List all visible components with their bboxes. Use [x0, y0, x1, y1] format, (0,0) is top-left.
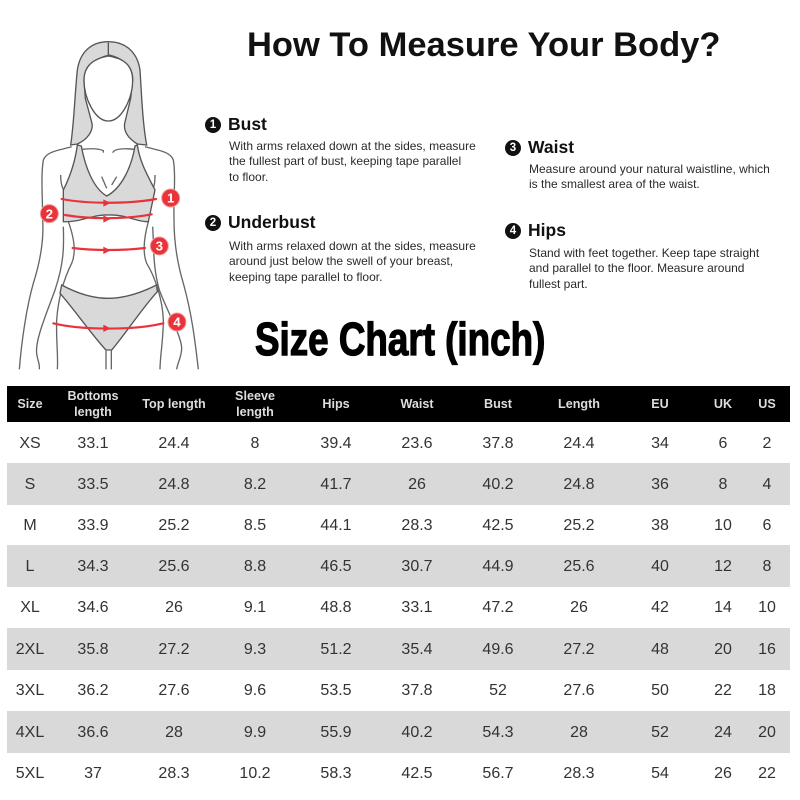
row XL: 33.1 [401, 599, 433, 616]
row 2XL: 27.2 [563, 641, 595, 658]
table header: UK [714, 397, 732, 411]
description: waist: Measure around your natural waistline, which [529, 162, 770, 176]
description: underbust [229, 239, 476, 284]
row M: 25.2 [158, 517, 190, 534]
description: bust: With arms relaxed down at the sides, measure [229, 139, 476, 153]
row XL: 34.6 [77, 599, 109, 616]
table header: Bust [484, 397, 512, 411]
row 3XL: 37.8 [401, 682, 433, 699]
heading: underbust: Underbust [228, 212, 316, 232]
row 5XL: 5XL [16, 765, 44, 782]
number badge 2 [205, 215, 221, 231]
row XS: 34 [651, 435, 669, 452]
row XL: 26 [570, 599, 588, 616]
row XL: 14 [714, 599, 732, 616]
row M: M [23, 517, 37, 534]
row 4XL: 4XL [16, 724, 44, 741]
row 4XL: 54.3 [482, 724, 514, 741]
table header: length [236, 405, 274, 419]
briefs [60, 285, 157, 350]
illustration: body with measurement lines [18, 41, 199, 370]
row 5XL: 28.3 [563, 765, 595, 782]
row 5XL: 42.5 [401, 765, 433, 782]
row 4XL: 40.2 [401, 724, 433, 741]
table header: EU [651, 397, 669, 411]
row L: 12 [714, 558, 732, 575]
table header: Waist [400, 397, 434, 411]
row L: 30.7 [401, 558, 433, 575]
number badge 1: 1 [210, 119, 216, 131]
row 2XL: 49.6 [482, 641, 514, 658]
number badge 4: 4 [510, 225, 516, 237]
row 2XL: 16 [758, 641, 776, 658]
measurement badges: 2 [46, 206, 53, 221]
table header: Top length [142, 397, 206, 411]
row L: 25.6 [158, 558, 190, 575]
row XL: 47.2 [482, 599, 514, 616]
row 5XL: 54 [651, 765, 669, 782]
table header: length [74, 405, 112, 419]
row 2XL: 9.3 [244, 641, 266, 658]
row 2XL: 2XL [16, 641, 44, 658]
row XL: 9.1 [244, 599, 266, 616]
row S: 41.7 [320, 476, 352, 493]
row S [7, 463, 790, 505]
row L: 44.9 [482, 558, 514, 575]
description: underbust: keeping tape parallel to floor. [229, 270, 382, 284]
heading: size chart: Size Chart (inch) [255, 313, 545, 365]
row 3XL [16, 682, 776, 699]
measurement badges: 3 [156, 239, 163, 254]
row XS: 6 [719, 435, 727, 452]
text block: underbust [205, 212, 476, 284]
row S: 33.5 [77, 476, 109, 493]
heading: bust: Bust [228, 114, 267, 134]
table header: Sleeve [235, 389, 275, 403]
description: hips [529, 246, 760, 291]
description: underbust: With arms relaxed down at the sides, measure [229, 239, 476, 253]
table: size chart [7, 386, 790, 782]
row S: 36 [651, 476, 669, 493]
description: bust: the fullest part of bust, keeping tape parallel [229, 154, 461, 168]
row 3XL: 27.6 [158, 682, 190, 699]
row L: 8.8 [244, 558, 266, 575]
text block: hips [505, 220, 760, 291]
heading: waist: Waist [528, 137, 574, 157]
table header [7, 386, 790, 422]
row 5XL: 22 [758, 765, 776, 782]
row XS: 33.1 [77, 435, 109, 452]
row M: 25.2 [563, 517, 595, 534]
row L: 25.6 [563, 558, 595, 575]
row S: 40.2 [482, 476, 514, 493]
row XS [19, 435, 771, 452]
row M: 28.3 [401, 517, 433, 534]
row L: L [26, 558, 34, 575]
row 2XL: 48 [651, 641, 669, 658]
row M: 10 [714, 517, 732, 534]
row 2XL: 35.4 [401, 641, 433, 658]
measurement lines [53, 199, 163, 329]
row 4XL [7, 711, 790, 753]
row XS: 37.8 [482, 435, 514, 452]
row S: S [25, 476, 35, 493]
title: How To Measure Your Body? [247, 26, 720, 64]
row 2XL: 27.2 [158, 641, 190, 658]
row 3XL: 22 [714, 682, 732, 699]
description: hips: fullest part. [529, 277, 588, 291]
row XS: XS [19, 435, 41, 452]
row 4XL: 55.9 [320, 724, 352, 741]
row 4XL: 52 [651, 724, 669, 741]
row 4XL: 36.6 [77, 724, 109, 741]
body outline [19, 147, 198, 369]
arrowheads [103, 199, 111, 332]
number badge 3: 3 [510, 142, 516, 154]
row S: 8 [719, 476, 727, 493]
row 5XL: 10.2 [239, 765, 271, 782]
text block: waist [505, 137, 770, 191]
measurement badges [40, 189, 186, 331]
row 5XL: 26 [714, 765, 732, 782]
row S: 24.8 [563, 476, 595, 493]
row 5XL: 28.3 [158, 765, 190, 782]
row M: 8.5 [244, 517, 266, 534]
measurement badges: 4 [173, 315, 181, 330]
measurement badges: 1 [167, 191, 175, 206]
description: bust [229, 139, 476, 184]
description: hips: and parallel to the floor. Measure around [529, 261, 744, 275]
row XS: 24.4 [158, 435, 190, 452]
row 4XL: 28 [570, 724, 588, 741]
row XL: 42 [651, 599, 669, 616]
description: bust: to floor. [229, 170, 268, 184]
row 3XL: 9.6 [244, 682, 266, 699]
row XL [20, 599, 776, 616]
row 3XL: 52 [489, 682, 507, 699]
row S: 24.8 [158, 476, 190, 493]
description: waist: is the smallest area of the waist. [529, 177, 700, 191]
row 3XL: 3XL [16, 682, 44, 699]
row L: 40 [651, 558, 669, 575]
row M [23, 517, 771, 534]
table header: Length [558, 397, 600, 411]
bra [63, 145, 155, 222]
row 4XL: 28 [165, 724, 183, 741]
row M: 44.1 [320, 517, 352, 534]
row XS: 39.4 [320, 435, 352, 452]
table header: US [758, 397, 776, 411]
row XS: 8 [251, 435, 259, 452]
row XS: 24.4 [563, 435, 595, 452]
row M: 33.9 [77, 517, 109, 534]
row 5XL: 37 [84, 765, 102, 782]
hair [71, 42, 147, 145]
heading: hips: Hips [528, 220, 566, 240]
row 5XL: 56.7 [482, 765, 514, 782]
row S: 8.2 [244, 476, 266, 493]
text block: bust [205, 114, 476, 184]
row L [7, 545, 790, 587]
row 3XL: 50 [651, 682, 669, 699]
row XL: 10 [758, 599, 776, 616]
row XS: 2 [763, 435, 771, 452]
row M: 38 [651, 517, 669, 534]
description: hips: Stand with feet together. Keep tape straight [529, 246, 759, 260]
row XL: 26 [165, 599, 183, 616]
number badge 2: 2 [210, 217, 216, 229]
row L: 34.3 [77, 558, 109, 575]
row M: 6 [763, 517, 771, 534]
row 3XL: 18 [758, 682, 776, 699]
number badge 4 [505, 223, 521, 239]
row 2XL [7, 628, 790, 670]
row 4XL: 24 [714, 724, 732, 741]
number badge 3 [505, 140, 521, 156]
row XL: 48.8 [320, 599, 352, 616]
row 3XL: 27.6 [563, 682, 595, 699]
row 5XL: 58.3 [320, 765, 352, 782]
row M: 42.5 [482, 517, 514, 534]
row 5XL [16, 765, 776, 782]
row 4XL: 9.9 [244, 724, 266, 741]
row XS: 23.6 [401, 435, 433, 452]
row 2XL: 51.2 [320, 641, 352, 658]
row S: 4 [763, 476, 771, 493]
row 4XL: 20 [758, 724, 776, 741]
row L: 8 [763, 558, 771, 575]
row 2XL: 35.8 [77, 641, 109, 658]
number badge 1 [205, 117, 221, 133]
row 2XL: 20 [714, 641, 732, 658]
row 3XL: 36.2 [77, 682, 109, 699]
row S: 26 [408, 476, 426, 493]
description: waist [529, 162, 770, 191]
face [84, 56, 133, 121]
row XL: XL [20, 599, 40, 616]
row 3XL: 53.5 [320, 682, 352, 699]
table header: Bottoms [67, 389, 119, 403]
description: underbust: around just below the swell of your breast, [229, 254, 453, 268]
table header: Hips [322, 397, 350, 411]
row L: 46.5 [320, 558, 352, 575]
table header: Size [17, 397, 43, 411]
